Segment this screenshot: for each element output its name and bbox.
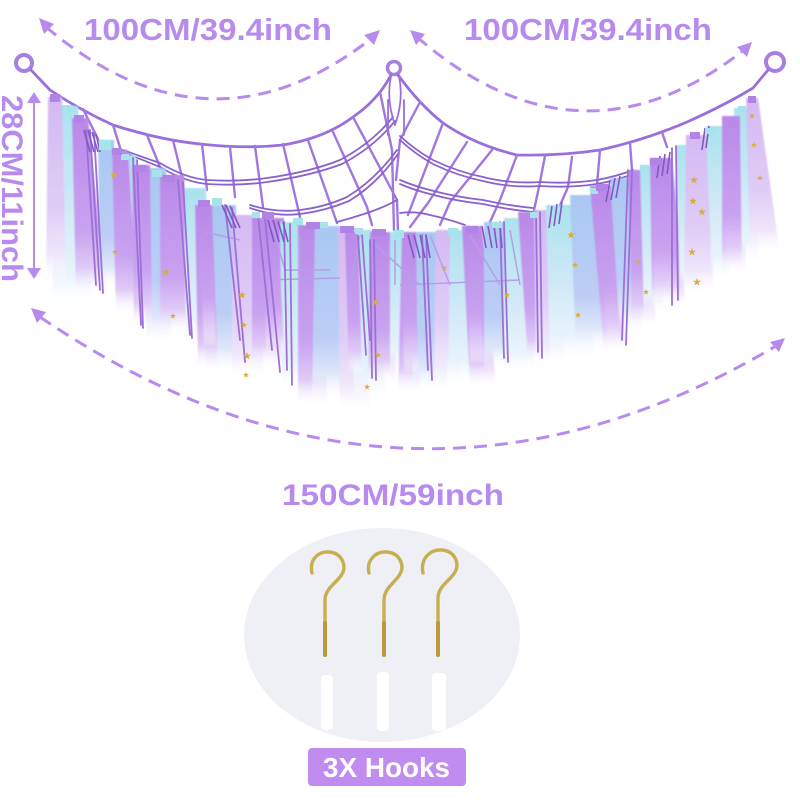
oval background	[244, 528, 520, 742]
net verticals and rows	[83, 92, 667, 232]
top rope	[31, 70, 768, 155]
label: top right width: 100CM/39.4inch	[464, 12, 712, 47]
icon: hook 1	[311, 552, 344, 655]
icon: hook 2	[368, 552, 402, 655]
tulle strips	[46, 97, 780, 412]
label: full width: 150CM/59inch	[282, 479, 504, 512]
label: top left width: 100CM/39.4inch	[84, 12, 332, 47]
macrame cords	[86, 130, 678, 385]
icon: wall anchor 3	[432, 673, 446, 731]
garland: rope, rings and net	[16, 53, 784, 232]
badge: 3X Hooks: 3X Hooks	[323, 752, 450, 783]
knots	[50, 94, 756, 238]
badge: 3X Hooks	[308, 748, 466, 786]
dimension arrow: top right span	[410, 30, 752, 111]
cord fans under knots	[84, 126, 709, 258]
panel: hooks on grey oval	[244, 528, 520, 742]
dimension arrow: full width	[31, 308, 785, 449]
ring: centre	[388, 62, 400, 74]
icon: wall anchor 1	[321, 675, 333, 730]
gold stars	[110, 113, 763, 390]
dimension arrow: top left span	[39, 18, 380, 99]
ring: right	[766, 53, 784, 71]
tassels: tulle strips and macrame cords	[46, 94, 780, 412]
dimension arrow: height	[27, 92, 41, 279]
cords: pale lavender web	[205, 225, 520, 285]
icon: hook 3	[422, 550, 457, 655]
icon: wall anchor 2	[377, 672, 389, 731]
centre web	[388, 76, 404, 135]
ring: left	[16, 55, 32, 71]
solid purple front strips	[198, 208, 216, 345]
